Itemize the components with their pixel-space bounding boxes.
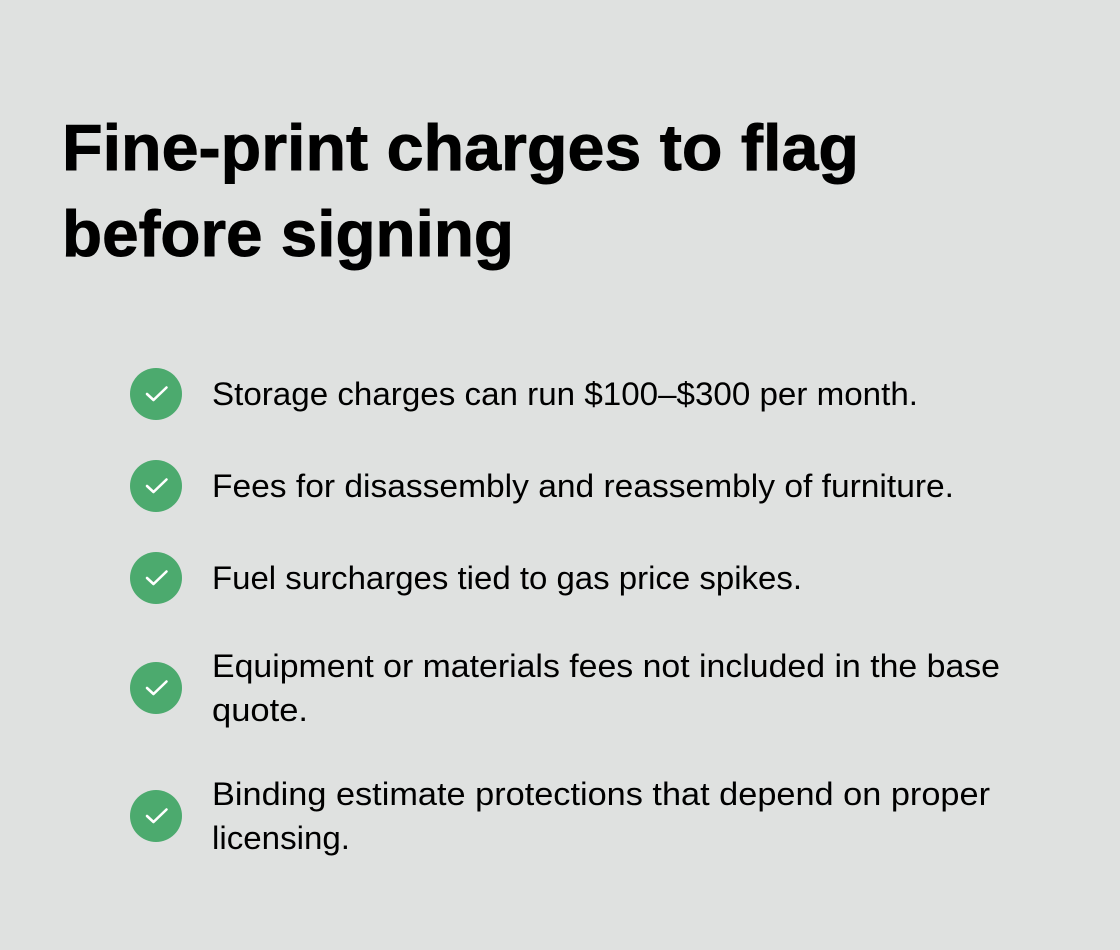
icon: check circle <box>130 662 182 714</box>
title: before signing <box>62 197 514 270</box>
item text: licensing. <box>212 820 350 856</box>
item text: Fuel surcharges tied to gas price spikes. <box>212 560 802 596</box>
item text: Equipment or materials fees not included in the base <box>212 648 1000 684</box>
item text <box>212 776 990 856</box>
title <box>62 111 859 270</box>
item 5: binding estimate <box>130 776 990 856</box>
item text: Storage charges can run $100–$300 per month. <box>212 376 918 412</box>
item text: Fees for disassembly and reassembly of furniture. <box>212 468 954 504</box>
item 4: equipment fees <box>130 648 1000 728</box>
icon: check circle <box>130 552 182 604</box>
item 2: disassembly fees <box>130 460 954 512</box>
item text: Binding estimate protections that depend on proper <box>212 776 990 812</box>
checklist <box>130 368 1000 856</box>
item text <box>212 648 1000 728</box>
icon: check circle <box>130 368 182 420</box>
item text: quote. <box>212 692 308 728</box>
title: Fine-print charges to flag <box>62 111 859 184</box>
icon: check circle <box>130 790 182 842</box>
item 3: fuel surcharges <box>130 552 802 604</box>
item 1: storage charges <box>130 368 918 420</box>
icon: check circle <box>130 460 182 512</box>
